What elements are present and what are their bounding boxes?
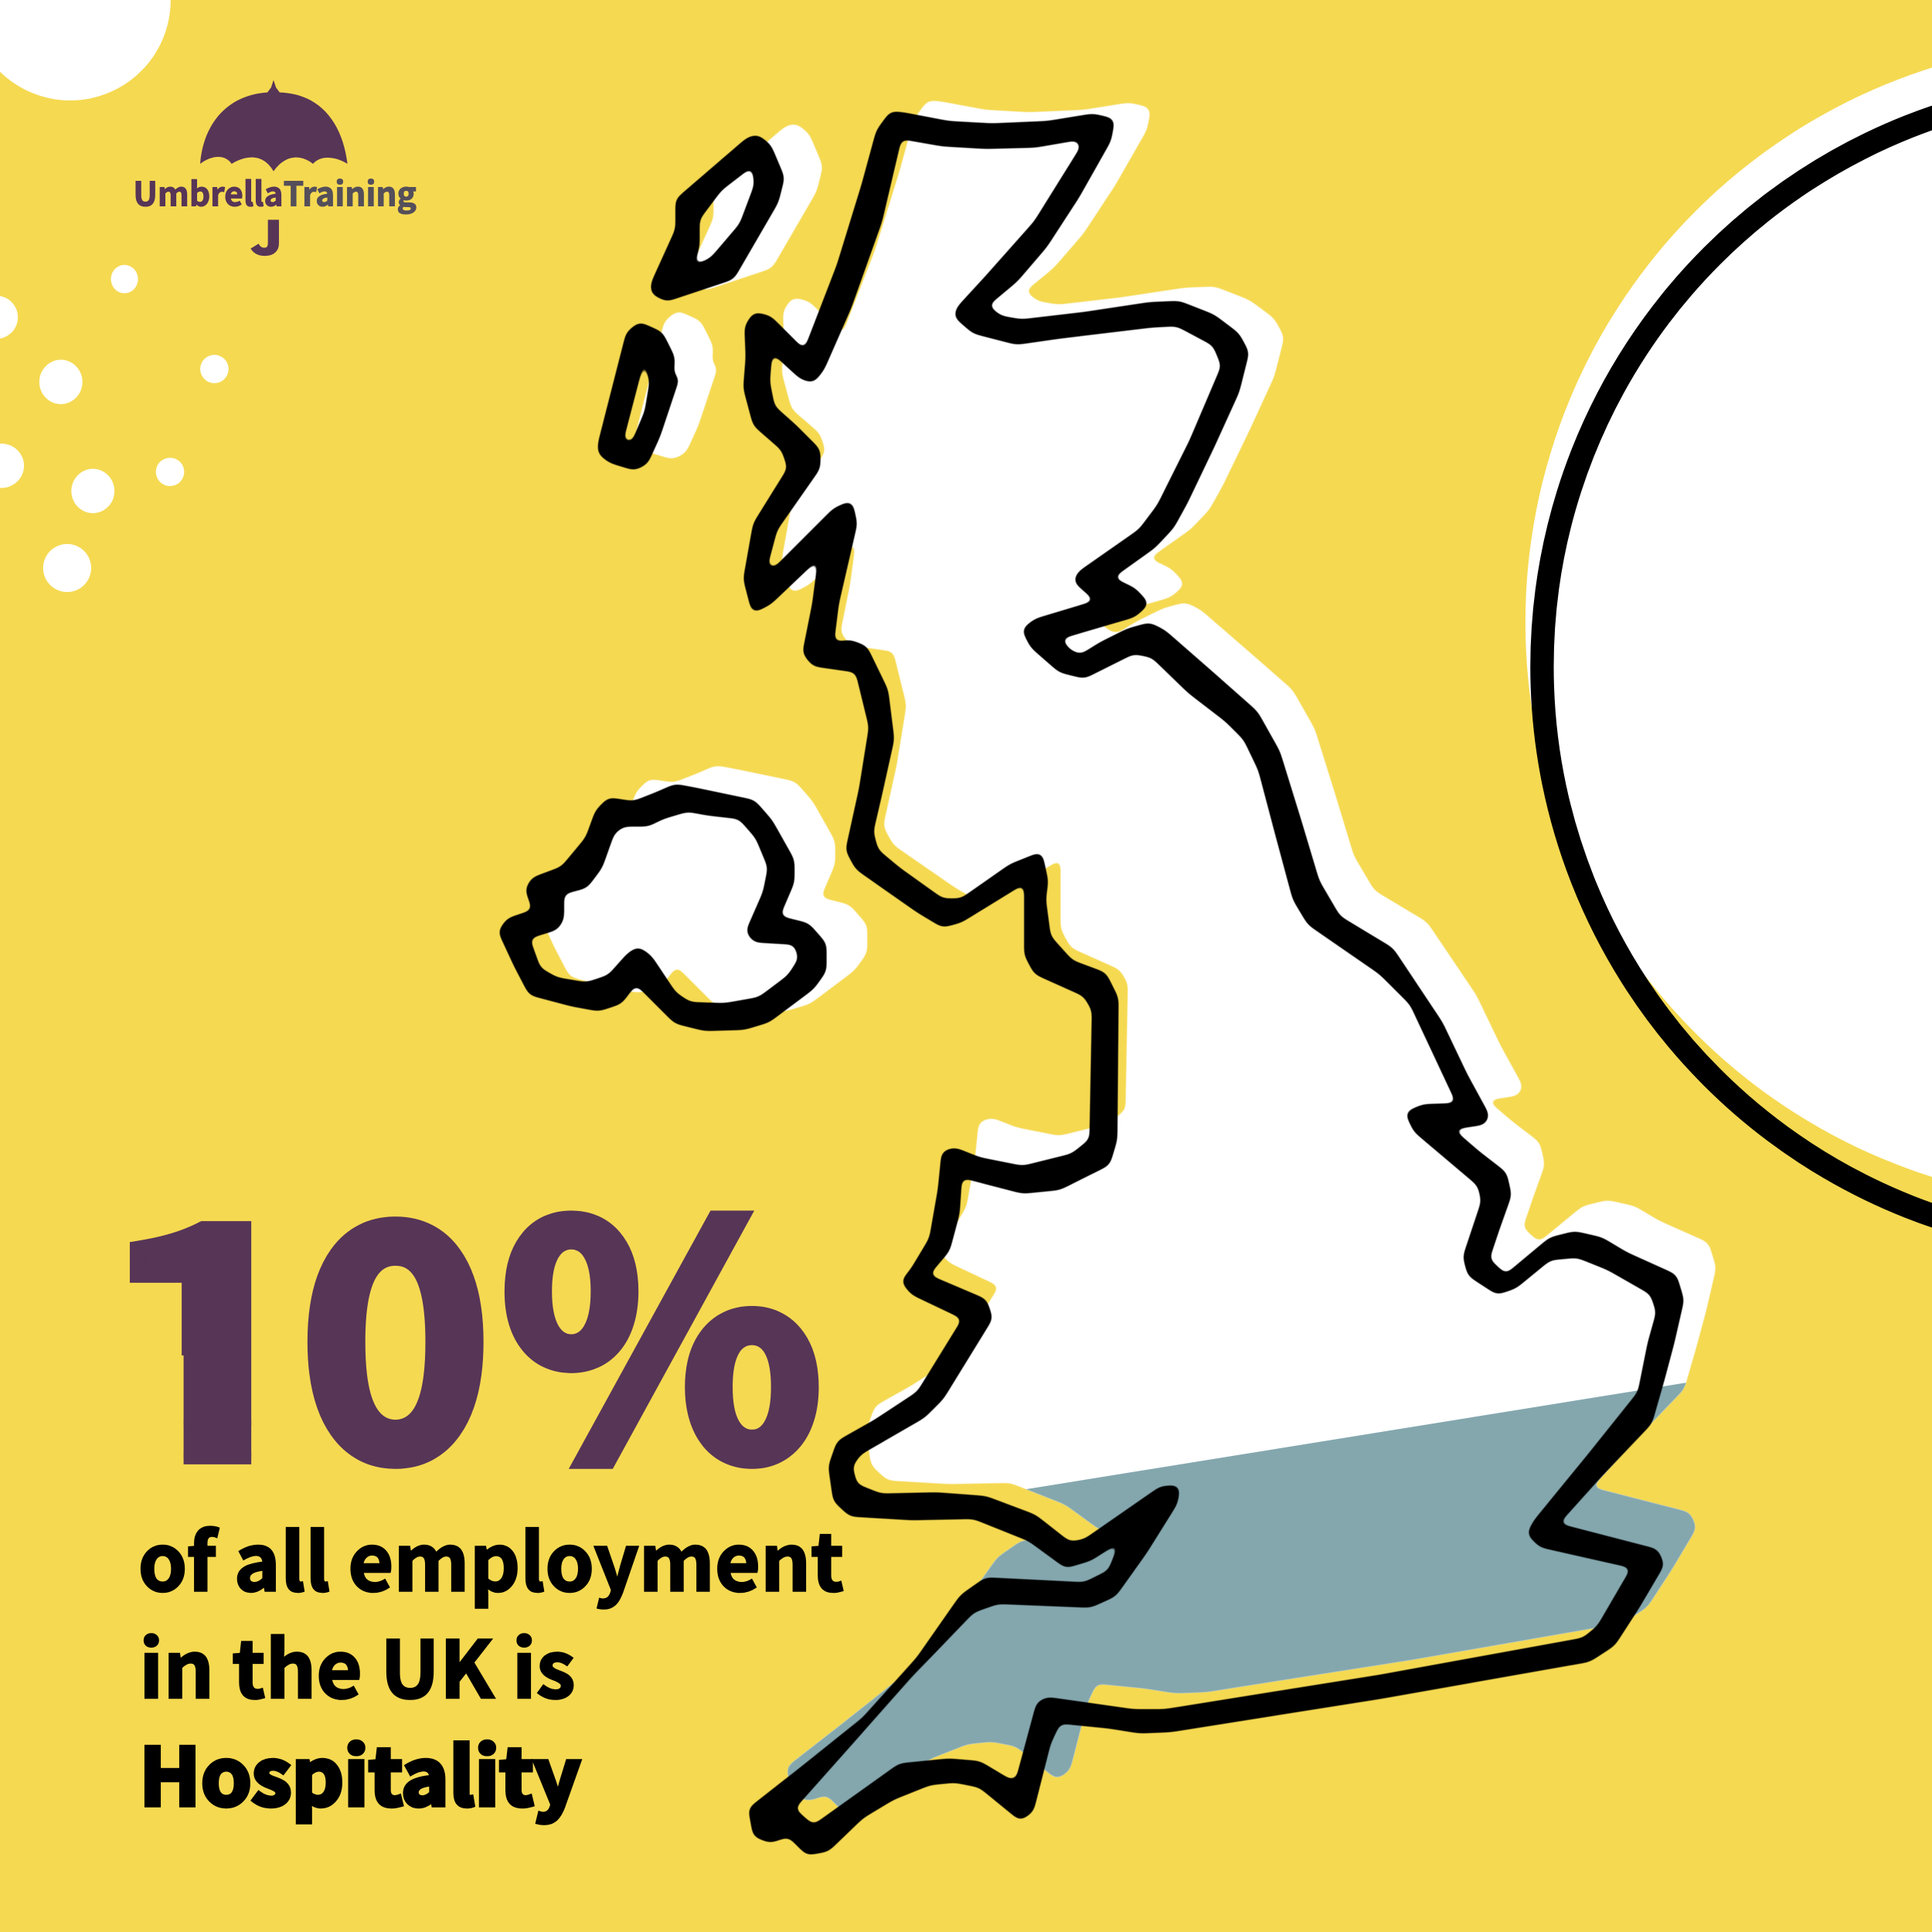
map outline: upper Scottish island xyxy=(651,135,784,301)
map outline: lower Scottish island xyxy=(599,323,679,469)
decorative circle: top left xyxy=(0,0,171,100)
big circle: white fill xyxy=(1526,41,1932,1204)
logo wordmark: UmbrellaTraining xyxy=(133,168,417,216)
percent sign: % xyxy=(500,1087,823,1551)
big circle: black ring xyxy=(1542,86,1932,1247)
digit 0: 0 xyxy=(299,1087,492,1551)
logo letter J: J xyxy=(251,202,282,267)
logo: Umbrella Training xyxy=(133,80,417,267)
map shadow: Scottish islands xyxy=(637,124,821,458)
body text: of all employment in the UK is Hospitality xyxy=(138,1500,844,1828)
text line 1: of all employment xyxy=(138,1500,844,1614)
text line 3: Hospitality xyxy=(139,1715,580,1828)
text line 2: in the UK is xyxy=(139,1607,576,1721)
icon: umbrella xyxy=(200,80,348,172)
digit 1: 1 xyxy=(96,1087,323,1551)
map outline: Ireland xyxy=(499,785,825,1030)
map outline: Great Britain xyxy=(744,112,1683,1855)
map shadow: Great Britain white xyxy=(783,101,1715,1812)
map shadow: Great Britain teal southern section xyxy=(787,1383,1696,1807)
map shadow: Ireland xyxy=(539,767,866,1012)
headline statistic: 10% xyxy=(130,1210,819,1469)
rain dots xyxy=(0,265,229,592)
